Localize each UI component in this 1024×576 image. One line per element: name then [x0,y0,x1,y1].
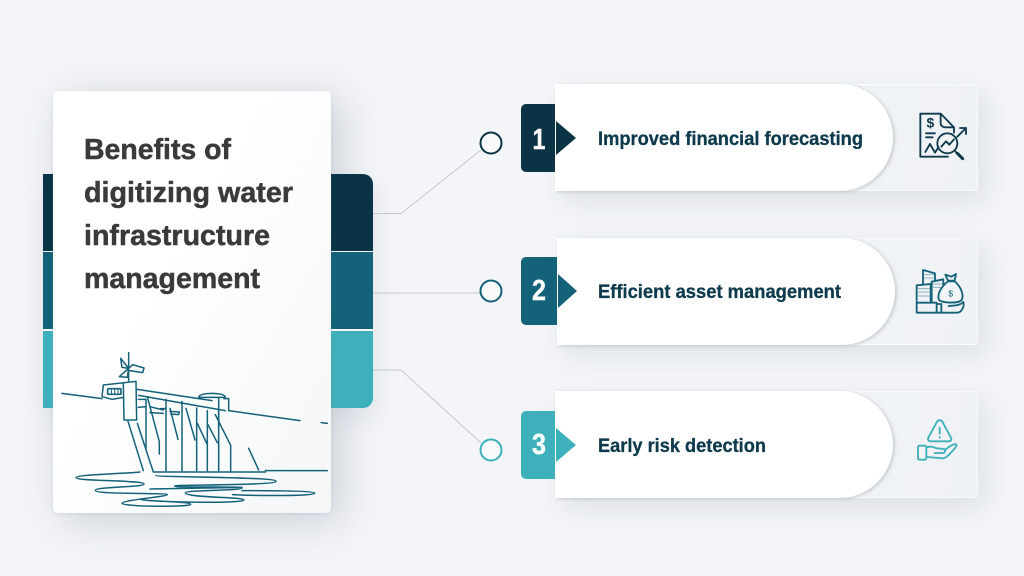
connector: bar 3 to circle 3 [373,370,481,443]
panel: benefit 2 card [557,238,978,345]
marker: circle 3 [480,440,502,460]
number tab 3 [521,411,576,479]
panel: benefit 1 card [555,84,978,191]
number tab 1: 1 [532,124,546,156]
panel: title card [53,91,331,513]
heading: card title [84,134,293,295]
illustration: hydroelectric dam with wind turbine [62,353,327,506]
icon: warning triangle over hand [918,420,957,460]
heading: card title: management [84,263,260,295]
icon: buildings and money bag [917,270,964,313]
marker: circle 2 [480,280,502,302]
heading: card title: Benefits of [84,134,231,166]
connector: bar 2 to circle 2 [373,292,480,294]
label: benefit 1: Improved financial forecasting [598,128,863,150]
heading: card title: infrastructure [84,220,270,252]
label: benefit 3: Early risk detection [598,435,766,457]
shadow behind title card [53,91,331,513]
label: benefit 2: Efficient asset management [598,281,841,303]
number tab 3: 3 [532,429,546,461]
icon: financial report with magnifier [920,114,966,159]
icon: buildings and money bag: $ [948,289,953,299]
marker: circle 1 [480,132,502,154]
connector: bar 1 to circle 1 [373,150,481,214]
number tab 1 [521,104,576,172]
number tab 2: 2 [532,275,546,307]
panel: stacked colour bars [43,174,373,408]
number tab 2 [521,257,577,325]
panel: benefit 3 card [555,391,978,498]
icon: financial report with magnifier: $ [926,115,934,131]
heading: card title: digitizing water [84,177,293,209]
